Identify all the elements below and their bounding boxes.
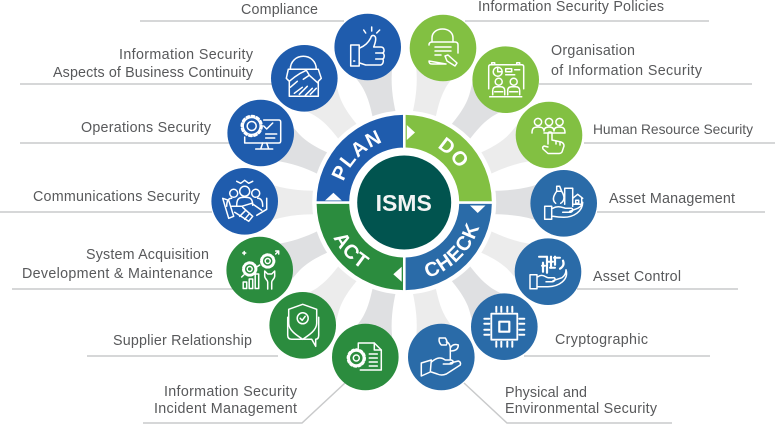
- label: Information Security Aspects of Business Continuity: Information Security: [119, 47, 254, 63]
- node: Organisation of Information Security: [472, 46, 539, 113]
- label: Organisation of Information Security: Organisation: [551, 43, 635, 59]
- label: Asset Management: Asset Management: [609, 191, 735, 207]
- node: Information Security Policies: [410, 15, 476, 81]
- label: Compliance: Compliance: [241, 2, 318, 18]
- node: Compliance: [334, 14, 401, 80]
- label: Cryptographic: Cryptographic: [555, 332, 648, 348]
- centre title: ISMS: [376, 190, 432, 216]
- node: Incident Management: [332, 324, 399, 390]
- node: System Acquisition: [226, 237, 293, 303]
- label: DO: DO: [438, 136, 467, 166]
- central PDCA ring: [312, 111, 496, 294]
- node: Supplier Relationship: [269, 292, 336, 359]
- icon: hand holding plant: [421, 338, 461, 376]
- label: System Acquisition Development & Maintenance: [22, 247, 213, 282]
- icon: thumbs up: [351, 27, 384, 66]
- label: Information Security Incident Management: Information Security: [164, 384, 298, 400]
- label: Physical and Environmental Security: Physical and: [505, 385, 587, 401]
- label: Information Security Incident Management: Incident Management: [154, 401, 297, 417]
- icon: microchip: [484, 307, 524, 347]
- icon: shield in speech bubble: [288, 304, 319, 346]
- label: Physical and Environmental Security: [505, 385, 658, 417]
- label: Operations Security: Operations Security: [81, 120, 212, 136]
- icon: people and pointing hand: [532, 118, 565, 154]
- label: Physical and Environmental Security: Environmental Security: [505, 401, 658, 417]
- centre circle: [357, 156, 451, 250]
- label: Information Security Incident Management: [154, 384, 298, 417]
- label: Supplier Relationship: Supplier Relationship: [113, 333, 252, 349]
- icon: gear and monitor: [242, 116, 281, 149]
- node: Continuity: [271, 45, 338, 112]
- segment: ACT: [317, 204, 403, 290]
- label: Information Security Aspects of Business Continuity: [53, 47, 254, 81]
- icon: meeting board: [489, 63, 524, 97]
- icon: people handshake: [223, 180, 267, 221]
- label: ACT: ACT: [333, 235, 370, 267]
- icon: handshake lock: [286, 56, 321, 96]
- node: Asset Control: [515, 238, 581, 305]
- label: Organisation of Information Security: of Information Security: [551, 63, 703, 79]
- segment: PLAN: [317, 115, 403, 201]
- label: Human Resource Security: Human Resource Security: [593, 122, 753, 137]
- icon: gear and document: [348, 343, 381, 370]
- label: System Acquisition Development & Maintenance: System Acquisition: [86, 247, 209, 263]
- icon: padlock document: [429, 29, 458, 66]
- marker triangles: [325, 125, 486, 282]
- background petals: [234, 30, 575, 374]
- node: Operations Security: [227, 100, 294, 166]
- icon: hand holding assets: [545, 186, 583, 219]
- label: System Acquisition Development & Maintenance: Development & Maintenance: [22, 266, 213, 282]
- icon: gears, bars, wrench: [242, 251, 279, 289]
- node: Human Resource Security: [516, 102, 582, 168]
- label: PLAN: PLAN: [331, 130, 382, 180]
- node: Cryptographic: [471, 293, 538, 360]
- label: CHECK: CHECK: [425, 222, 480, 276]
- segment: CHECK: [406, 204, 492, 290]
- label: Organisation of Information Security: [551, 43, 703, 79]
- node: Communications Security: [211, 168, 278, 235]
- label: Information Security Aspects of Business Continuity: Aspects of Business Continuity: [53, 65, 254, 81]
- icon: hand holding blocks: [530, 257, 567, 289]
- node: Asset Management: [530, 170, 597, 237]
- node: Physical and Environmental Security: [408, 324, 475, 390]
- label: Asset Control: Asset Control: [593, 269, 681, 285]
- segment: DO: [406, 115, 492, 201]
- label: Communications Security: Communications Security: [33, 189, 201, 205]
